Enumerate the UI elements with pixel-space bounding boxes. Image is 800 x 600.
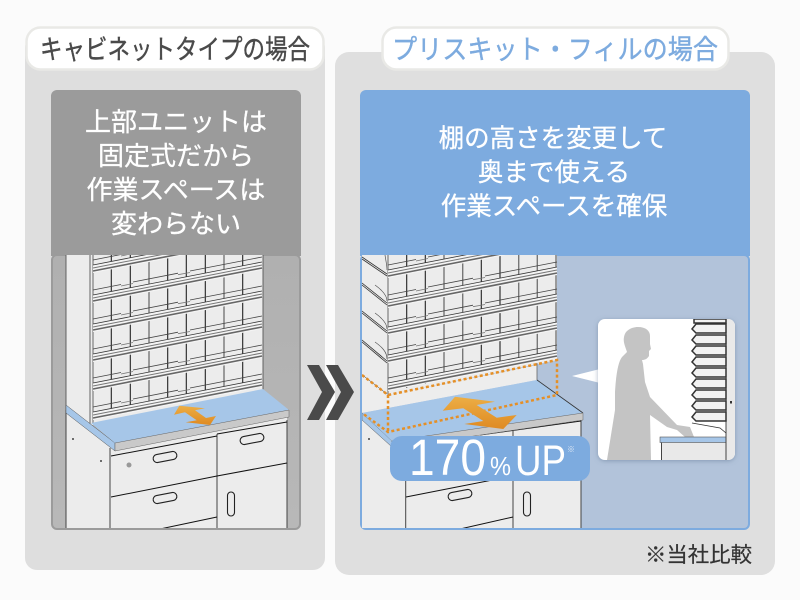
upper unit with raised shelves [362,255,558,395]
side wall [726,319,735,460]
expanded work area outline [362,360,557,432]
icon: person silhouette [607,327,694,460]
arrow: chevrons [307,365,354,420]
panel: cabinet type message [51,90,301,256]
callout: 170% UP badge: % [490,451,511,481]
lower cabinet [66,410,287,529]
side shelves [692,319,726,433]
callout: 170% UP badge [390,429,590,486]
panel: cabinet type message: 作業スペースは [87,170,265,207]
icon: depth arrow [174,406,216,425]
side counter [660,437,726,460]
panel: cabinet type message: 変わらない [111,204,241,241]
panel: Pri-kit Fill message: 棚の高さを変更して [439,118,667,155]
illustration: fixed cabinet [52,227,300,529]
upper unit [66,255,264,425]
panel: cabinet type message: 上部ユニットは [85,102,267,139]
panel: Pri-kit Fill message: 作業スペースを確保 [441,186,667,223]
heading: Pri-kit Fill: プリスキット・フィルの場合 [392,28,718,67]
wall behind counter [362,365,537,413]
panel: Pri-kit Fill background [335,52,775,575]
note: in-house comparison: ※当社比較 [645,539,752,569]
callout: 170% UP badge: UP [515,437,566,485]
callout: 170% UP badge: 170 [409,429,486,486]
callout: side view inset [572,319,735,460]
panel: Pri-kit Fill message [360,90,750,256]
panel: cabinet type message: 固定式だから [98,136,254,173]
countertop [362,380,583,448]
countertop [66,389,289,451]
panel: cabinet type background [25,36,325,570]
heading: cabinet type: キャビネットタイプの場合 [40,28,310,67]
illustration: adjustable cabinet [361,232,749,529]
lower cabinet [362,414,581,529]
panel: Pri-kit Fill message: 奥まで使える [478,152,630,189]
callout: 170% UP badge: ※ [567,444,575,455]
icon: depth arrow [443,397,517,429]
